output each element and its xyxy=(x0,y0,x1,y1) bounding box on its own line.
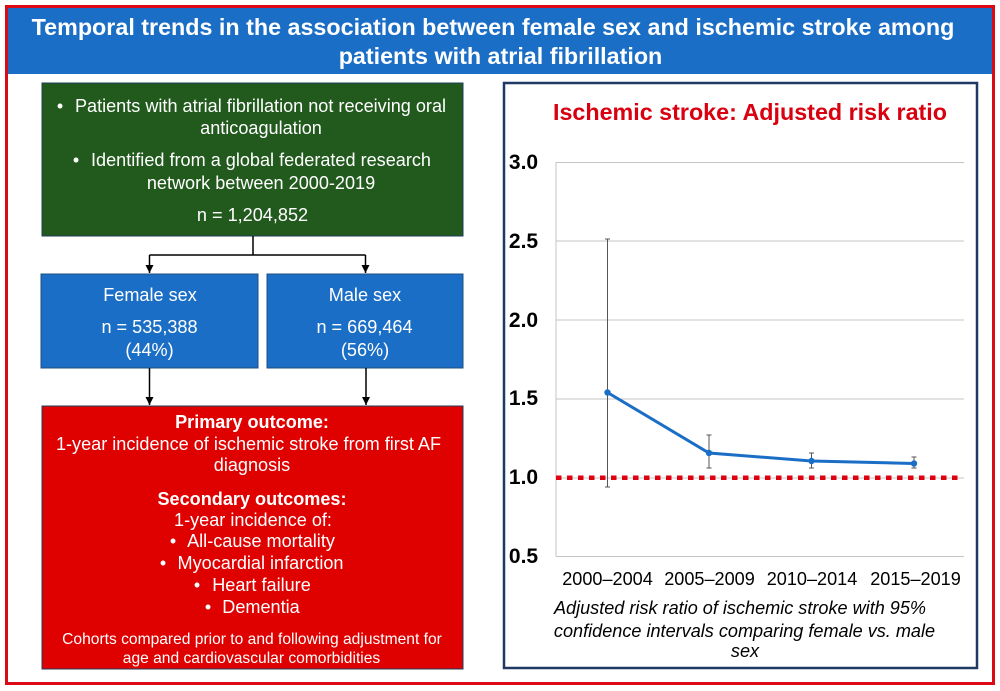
outcomes text: Secondary outcomes: xyxy=(157,489,347,509)
panel: chart xyxy=(504,83,977,668)
reference line at 1.0 xyxy=(556,475,961,480)
male text: n = 669,464 xyxy=(316,317,413,337)
y axis labels xyxy=(509,151,538,568)
outcomes text: • xyxy=(160,553,166,573)
panel: female sex xyxy=(41,274,258,368)
population text: network between 2000-2019 xyxy=(147,173,375,193)
x axis labels: 2000–2004 xyxy=(562,569,653,589)
chart heading: Ischemic stroke: Adjusted risk ratio xyxy=(553,99,947,125)
outcomes text: Cohorts compared prior to and following adjustment for xyxy=(62,631,442,648)
female text: n = 535,388 xyxy=(101,317,198,337)
y axis labels: 1.0 xyxy=(509,466,538,489)
outcomes text: • xyxy=(170,531,176,551)
population text: Identified from a global federated research xyxy=(91,150,431,170)
female text: (44%) xyxy=(125,340,174,360)
chart caption xyxy=(553,598,935,661)
panel: male sex xyxy=(267,274,463,368)
female text: Female sex xyxy=(103,285,197,305)
outcomes text: 1-year incidence of: xyxy=(174,510,332,530)
outcomes text: 1-year incidence of ischemic stroke from first AF xyxy=(56,434,441,454)
outcomes text: age and cardiovascular comorbidities xyxy=(123,650,380,667)
chart caption: confidence intervals comparing female vs. male xyxy=(554,621,935,641)
line chart xyxy=(509,151,964,589)
panel: study population xyxy=(42,83,463,236)
arrows: cohorts to outcomes xyxy=(150,368,366,405)
y axis labels: 0.5 xyxy=(509,545,538,568)
outcomes text: Dementia xyxy=(222,597,301,617)
outcomes text: diagnosis xyxy=(214,455,290,475)
outcomes text: • xyxy=(194,575,200,595)
population text: n = 1,204,852 xyxy=(197,205,308,225)
population text: anticoagulation xyxy=(200,118,322,138)
y axis labels: 2.5 xyxy=(509,230,538,253)
population text xyxy=(57,96,446,225)
title: patients with atrial fibrillation xyxy=(339,43,662,69)
male text: (56%) xyxy=(341,340,389,360)
male text: Male sex xyxy=(329,285,401,305)
outcomes text: Primary outcome: xyxy=(175,412,329,432)
header banner xyxy=(8,8,992,74)
outcomes text: Myocardial infarction xyxy=(178,553,343,573)
error bars xyxy=(605,239,916,487)
data series xyxy=(604,389,917,467)
outcomes text: Heart failure xyxy=(212,575,311,595)
y axis labels: 1.5 xyxy=(509,387,538,410)
male text xyxy=(316,285,413,360)
arrows: population to sex cohorts xyxy=(150,236,366,273)
population text: • xyxy=(57,96,63,116)
chart caption: Adjusted risk ratio of ischemic stroke with 95% xyxy=(553,598,926,618)
y axis labels: 2.0 xyxy=(509,309,538,332)
x axis labels: 2010–2014 xyxy=(767,569,857,589)
chart caption: sex xyxy=(731,641,760,661)
female text xyxy=(101,285,198,360)
outcomes text: • xyxy=(205,597,211,617)
population text: • xyxy=(73,150,79,170)
x axis labels: 2005–2009 xyxy=(664,569,755,589)
outcomes text: All-cause mortality xyxy=(187,531,336,551)
y axis labels: 3.0 xyxy=(509,151,538,174)
title: Temporal trends in the association between female sex and ischemic stroke among xyxy=(32,14,954,40)
outcomes text xyxy=(56,412,442,667)
panel: outcomes xyxy=(42,406,463,669)
population text: Patients with atrial fibrillation not receiving oral xyxy=(75,96,446,116)
x axis labels xyxy=(562,569,961,589)
x axis labels: 2015–2019 xyxy=(870,569,961,589)
